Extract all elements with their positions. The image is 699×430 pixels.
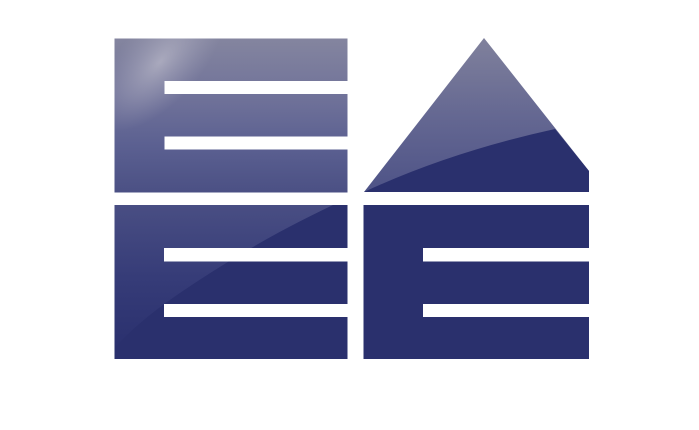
- block: top-left E: [114, 38, 348, 192]
- block: bottom-left E: [114, 205, 348, 359]
- block: bottom-right E: [364, 205, 589, 359]
- block: triangle roof: [364, 38, 589, 192]
